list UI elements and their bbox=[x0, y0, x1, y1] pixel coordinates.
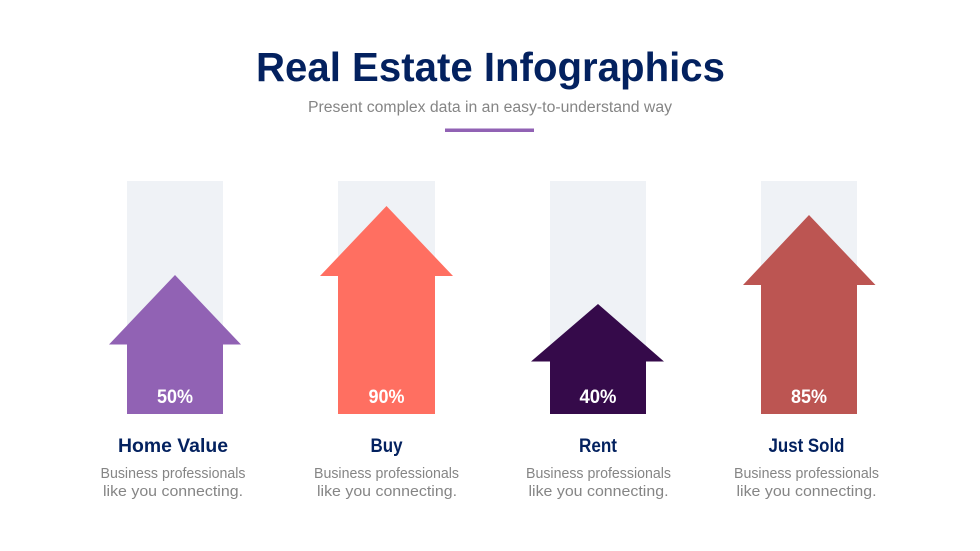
description: just sold bbox=[734, 465, 879, 500]
heading: home value: Home Value bbox=[118, 435, 228, 457]
description: just sold: like you connecting. bbox=[736, 483, 876, 500]
description: home value: like you connecting. bbox=[103, 483, 243, 500]
panel: just sold bbox=[734, 181, 879, 500]
description: rent: Business professionals bbox=[526, 465, 671, 482]
percentage: 85%: 85% bbox=[791, 386, 827, 408]
description: buy: like you connecting. bbox=[317, 483, 457, 500]
description: home value: Business professionals bbox=[100, 465, 246, 482]
percentage: 90%: 90% bbox=[368, 386, 404, 408]
heading: just sold: Just Sold bbox=[768, 435, 844, 457]
arrow: rent 40% bbox=[531, 304, 664, 414]
description: rent bbox=[526, 465, 671, 500]
arrow: buy 90% bbox=[320, 206, 453, 414]
bar track: just sold bbox=[761, 181, 857, 414]
panel: buy bbox=[314, 181, 459, 500]
title: Real Estate Infographics bbox=[256, 44, 725, 90]
arrow: home value 50% bbox=[109, 275, 241, 414]
title underline bbox=[445, 128, 534, 132]
bar track: home value bbox=[127, 181, 223, 414]
panel: rent bbox=[526, 181, 671, 500]
description: buy: Business professionals bbox=[314, 465, 459, 482]
bar track: buy bbox=[338, 181, 435, 414]
description: rent: like you connecting. bbox=[528, 483, 668, 500]
arrow: just sold 85% bbox=[743, 215, 876, 414]
description: home value bbox=[100, 465, 246, 500]
description: just sold: Business professionals bbox=[734, 465, 879, 482]
heading: rent: Rent bbox=[579, 435, 617, 457]
percentage: 50%: 50% bbox=[157, 386, 193, 408]
bar track: rent bbox=[550, 181, 646, 414]
heading: buy: Buy bbox=[370, 435, 403, 457]
subtitle: Present complex data in an easy-to-understand way bbox=[308, 99, 672, 116]
percentage: 40%: 40% bbox=[580, 386, 616, 408]
description: buy bbox=[314, 465, 459, 500]
panel: home value bbox=[100, 181, 246, 500]
